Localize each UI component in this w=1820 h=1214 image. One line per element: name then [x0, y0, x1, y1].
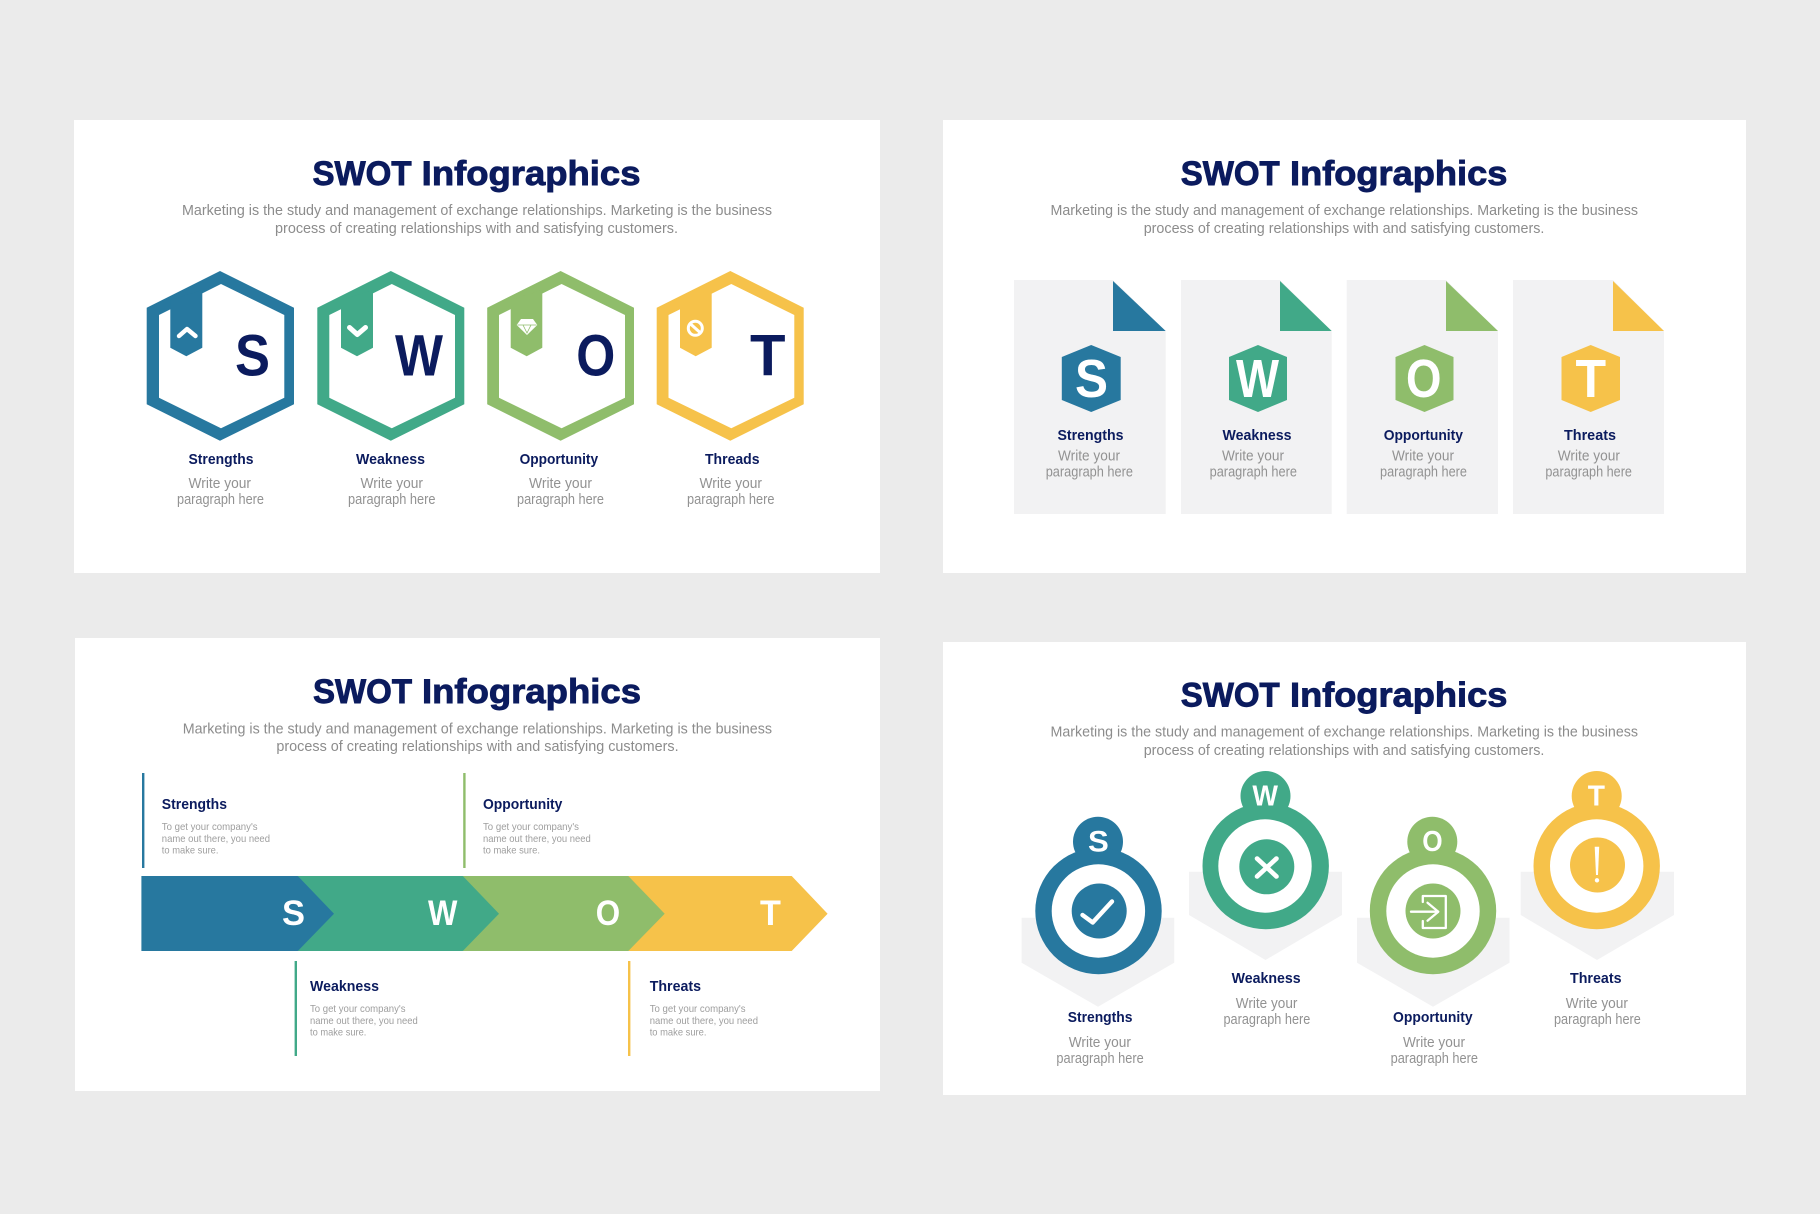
letter W: W — [1236, 349, 1279, 409]
arrow: Opportunity segment: O — [596, 894, 620, 933]
paragraph — [1380, 449, 1467, 481]
paragraph: Write your — [1058, 449, 1120, 465]
subtitle — [182, 202, 772, 237]
callout: Strengths: To get your company's — [162, 821, 258, 833]
panel: arrow SWOT — [75, 638, 880, 1091]
fold triangle — [1113, 281, 1166, 331]
hexagon badge — [1062, 345, 1121, 412]
paragraph: paragraph here — [1391, 1051, 1478, 1067]
paragraph: Write your — [1222, 449, 1284, 465]
title: Infographics — [422, 673, 641, 711]
paragraph: paragraph here — [687, 492, 774, 508]
hexagon card: Strengths — [147, 271, 294, 508]
icon: check — [1082, 902, 1112, 922]
title — [312, 155, 640, 193]
letter S: S — [235, 324, 270, 388]
title: Infographics — [1290, 155, 1507, 193]
letter T: T — [750, 324, 786, 388]
subtitle: process of creating relationships with and satisfying customers. — [276, 738, 679, 755]
callout: Strengths: name out there, you need — [162, 833, 270, 845]
paragraph: paragraph here — [1545, 465, 1632, 481]
paragraph: paragraph here — [177, 492, 264, 508]
paragraph: paragraph here — [1056, 1051, 1144, 1067]
hexagon card: Weakness — [317, 271, 464, 508]
subtitle — [1050, 202, 1638, 237]
paragraph — [1391, 1035, 1478, 1067]
paragraph — [1224, 996, 1310, 1028]
letter W: W — [395, 324, 443, 388]
target: Strengths — [1022, 817, 1174, 1067]
icon: chevron up — [179, 329, 196, 336]
paragraph: paragraph here — [348, 492, 436, 508]
subtitle: Marketing is the study and management of exchange relationships. Marketing is the business — [1050, 202, 1638, 219]
panel: folded pages SWOT — [943, 120, 1746, 573]
hexagon badge — [1562, 345, 1620, 412]
icon: diamond — [517, 319, 537, 335]
panel: hexagons SWOT — [74, 120, 880, 573]
title: SWOT — [1181, 677, 1280, 715]
callout: Weakness: To get your company's — [310, 1003, 406, 1015]
arrow: Weakness segment — [298, 876, 499, 951]
paragraph: Write your — [1566, 996, 1628, 1012]
bookmark tab — [341, 290, 373, 356]
paragraph: Write your — [700, 476, 762, 492]
paragraph: Write your — [1558, 449, 1620, 465]
paragraph: paragraph here — [517, 492, 604, 508]
page card: Weakness — [1181, 280, 1332, 514]
callout: Weakness: name out there, you need — [310, 1015, 418, 1027]
subtitle: Marketing is the study and management of exchange relationships. Marketing is the business — [183, 720, 772, 737]
paragraph: Write your — [1236, 996, 1298, 1012]
fold triangle — [1280, 281, 1332, 331]
subtitle — [1050, 724, 1638, 759]
subtitle: process of creating relationships with and satisfying customers. — [1144, 220, 1544, 237]
paragraph — [1210, 449, 1297, 481]
title: SWOT — [312, 155, 412, 193]
title — [313, 673, 641, 711]
callout: Opportunity: To get your company's — [483, 821, 579, 833]
hexagon badge — [1229, 345, 1287, 412]
letter O: O — [1406, 349, 1442, 409]
paragraph: paragraph here — [1224, 1012, 1310, 1028]
paragraph — [1554, 996, 1641, 1028]
paragraph: paragraph here — [1554, 1012, 1641, 1028]
label Weakness: Weakness — [1232, 970, 1301, 987]
label Threats: Threats — [1570, 970, 1622, 987]
callout: Strengths: to make sure. — [162, 845, 218, 857]
label Weakness: Weakness — [356, 451, 425, 468]
subtitle: process of creating relationships with and satisfying customers. — [1144, 742, 1544, 759]
callout: Threats: Threats — [650, 978, 701, 995]
arrow: Threats segment: T — [760, 894, 781, 933]
page card: Threats — [1513, 280, 1664, 514]
icon: exclamation — [1595, 847, 1599, 882]
title: Infographics — [1290, 677, 1507, 715]
page card: Strengths — [1014, 280, 1166, 514]
hexagon card: Threads — [657, 271, 804, 508]
callout: Opportunity: name out there, you need — [483, 833, 591, 845]
hexagon badge — [1396, 345, 1454, 412]
callout: Threats — [628, 961, 758, 1056]
paragraph: Write your — [529, 476, 592, 492]
arrow: Opportunity segment — [463, 876, 665, 951]
callout: Weakness: to make sure. — [310, 1027, 366, 1039]
callout: Strengths — [142, 773, 270, 868]
title: Infographics — [422, 155, 640, 193]
callout: Strengths: Strengths — [162, 796, 227, 813]
paragraph: Write your — [1392, 449, 1454, 465]
title: SWOT — [1181, 155, 1280, 193]
paragraph — [687, 476, 774, 508]
label Opportunity: Opportunity — [1393, 1009, 1473, 1026]
bookmark tab — [680, 290, 712, 356]
paragraph: paragraph here — [1046, 465, 1133, 481]
paragraph — [177, 476, 264, 508]
letter S: S — [1075, 349, 1108, 409]
title: SWOT — [313, 673, 412, 711]
arrow: Weakness segment: W — [428, 894, 457, 933]
label Opportunity: Opportunity — [1384, 427, 1464, 444]
paragraph: paragraph here — [1210, 465, 1297, 481]
letter O: O — [1422, 826, 1443, 858]
callout: Opportunity: Opportunity — [483, 796, 563, 813]
label Weakness: Weakness — [1222, 427, 1292, 444]
callout: Threats: name out there, you need — [650, 1015, 758, 1027]
target: Weakness — [1189, 771, 1342, 1028]
label Threads: Threads — [705, 451, 760, 468]
letter W: W — [1252, 780, 1279, 812]
title — [1181, 677, 1507, 715]
callout: Opportunity — [463, 773, 591, 868]
fold triangle — [1446, 281, 1498, 331]
letter T: T — [1576, 349, 1606, 409]
subtitle — [183, 720, 772, 755]
label Opportunity: Opportunity — [520, 451, 599, 468]
arrow: Strengths segment: S — [282, 894, 305, 933]
letter T: T — [1588, 780, 1605, 812]
label Threats: Threats — [1564, 427, 1616, 444]
target: Opportunity — [1357, 817, 1510, 1067]
callout: Threats: To get your company's — [650, 1003, 746, 1015]
icon: enter — [1411, 896, 1446, 928]
paragraph — [517, 476, 604, 508]
paragraph: Write your — [1069, 1035, 1131, 1051]
letter S: S — [1088, 825, 1109, 858]
callout: Opportunity: to make sure. — [483, 845, 540, 857]
bookmark tab — [170, 290, 202, 356]
paragraph: Write your — [188, 476, 251, 492]
fold triangle — [1613, 281, 1664, 331]
icon: ban — [688, 321, 702, 335]
subtitle: Marketing is the study and management of exchange relationships. Marketing is the business — [1050, 724, 1638, 741]
callout: Weakness: Weakness — [310, 978, 379, 995]
bookmark tab — [511, 290, 542, 356]
hexagon card: Opportunity — [487, 271, 634, 508]
target: Threats — [1521, 771, 1674, 1028]
page card: Opportunity — [1347, 280, 1498, 514]
paragraph — [1056, 1035, 1144, 1067]
paragraph: Write your — [1403, 1035, 1465, 1051]
subtitle: Marketing is the study and management of exchange relationships. Marketing is the business — [182, 202, 772, 219]
arrow: Strengths segment — [141, 876, 334, 951]
paragraph — [1545, 449, 1632, 481]
label Strengths: Strengths — [1058, 427, 1124, 444]
callout: Threats: to make sure. — [650, 1027, 706, 1039]
paragraph: paragraph here — [1380, 465, 1467, 481]
arrow: Threats segment — [628, 876, 828, 951]
label Strengths: Strengths — [188, 451, 254, 468]
label Strengths: Strengths — [1068, 1009, 1132, 1026]
panel: target circles SWOT — [943, 642, 1746, 1095]
letter O: O — [576, 324, 615, 388]
icon: cross — [1257, 858, 1276, 876]
icon: chevron down — [350, 328, 366, 334]
paragraph — [348, 476, 436, 508]
title — [1181, 155, 1507, 193]
paragraph: Write your — [360, 476, 423, 492]
paragraph — [1046, 449, 1133, 481]
subtitle: process of creating relationships with and satisfying customers. — [275, 220, 678, 237]
callout: Weakness — [295, 961, 418, 1056]
